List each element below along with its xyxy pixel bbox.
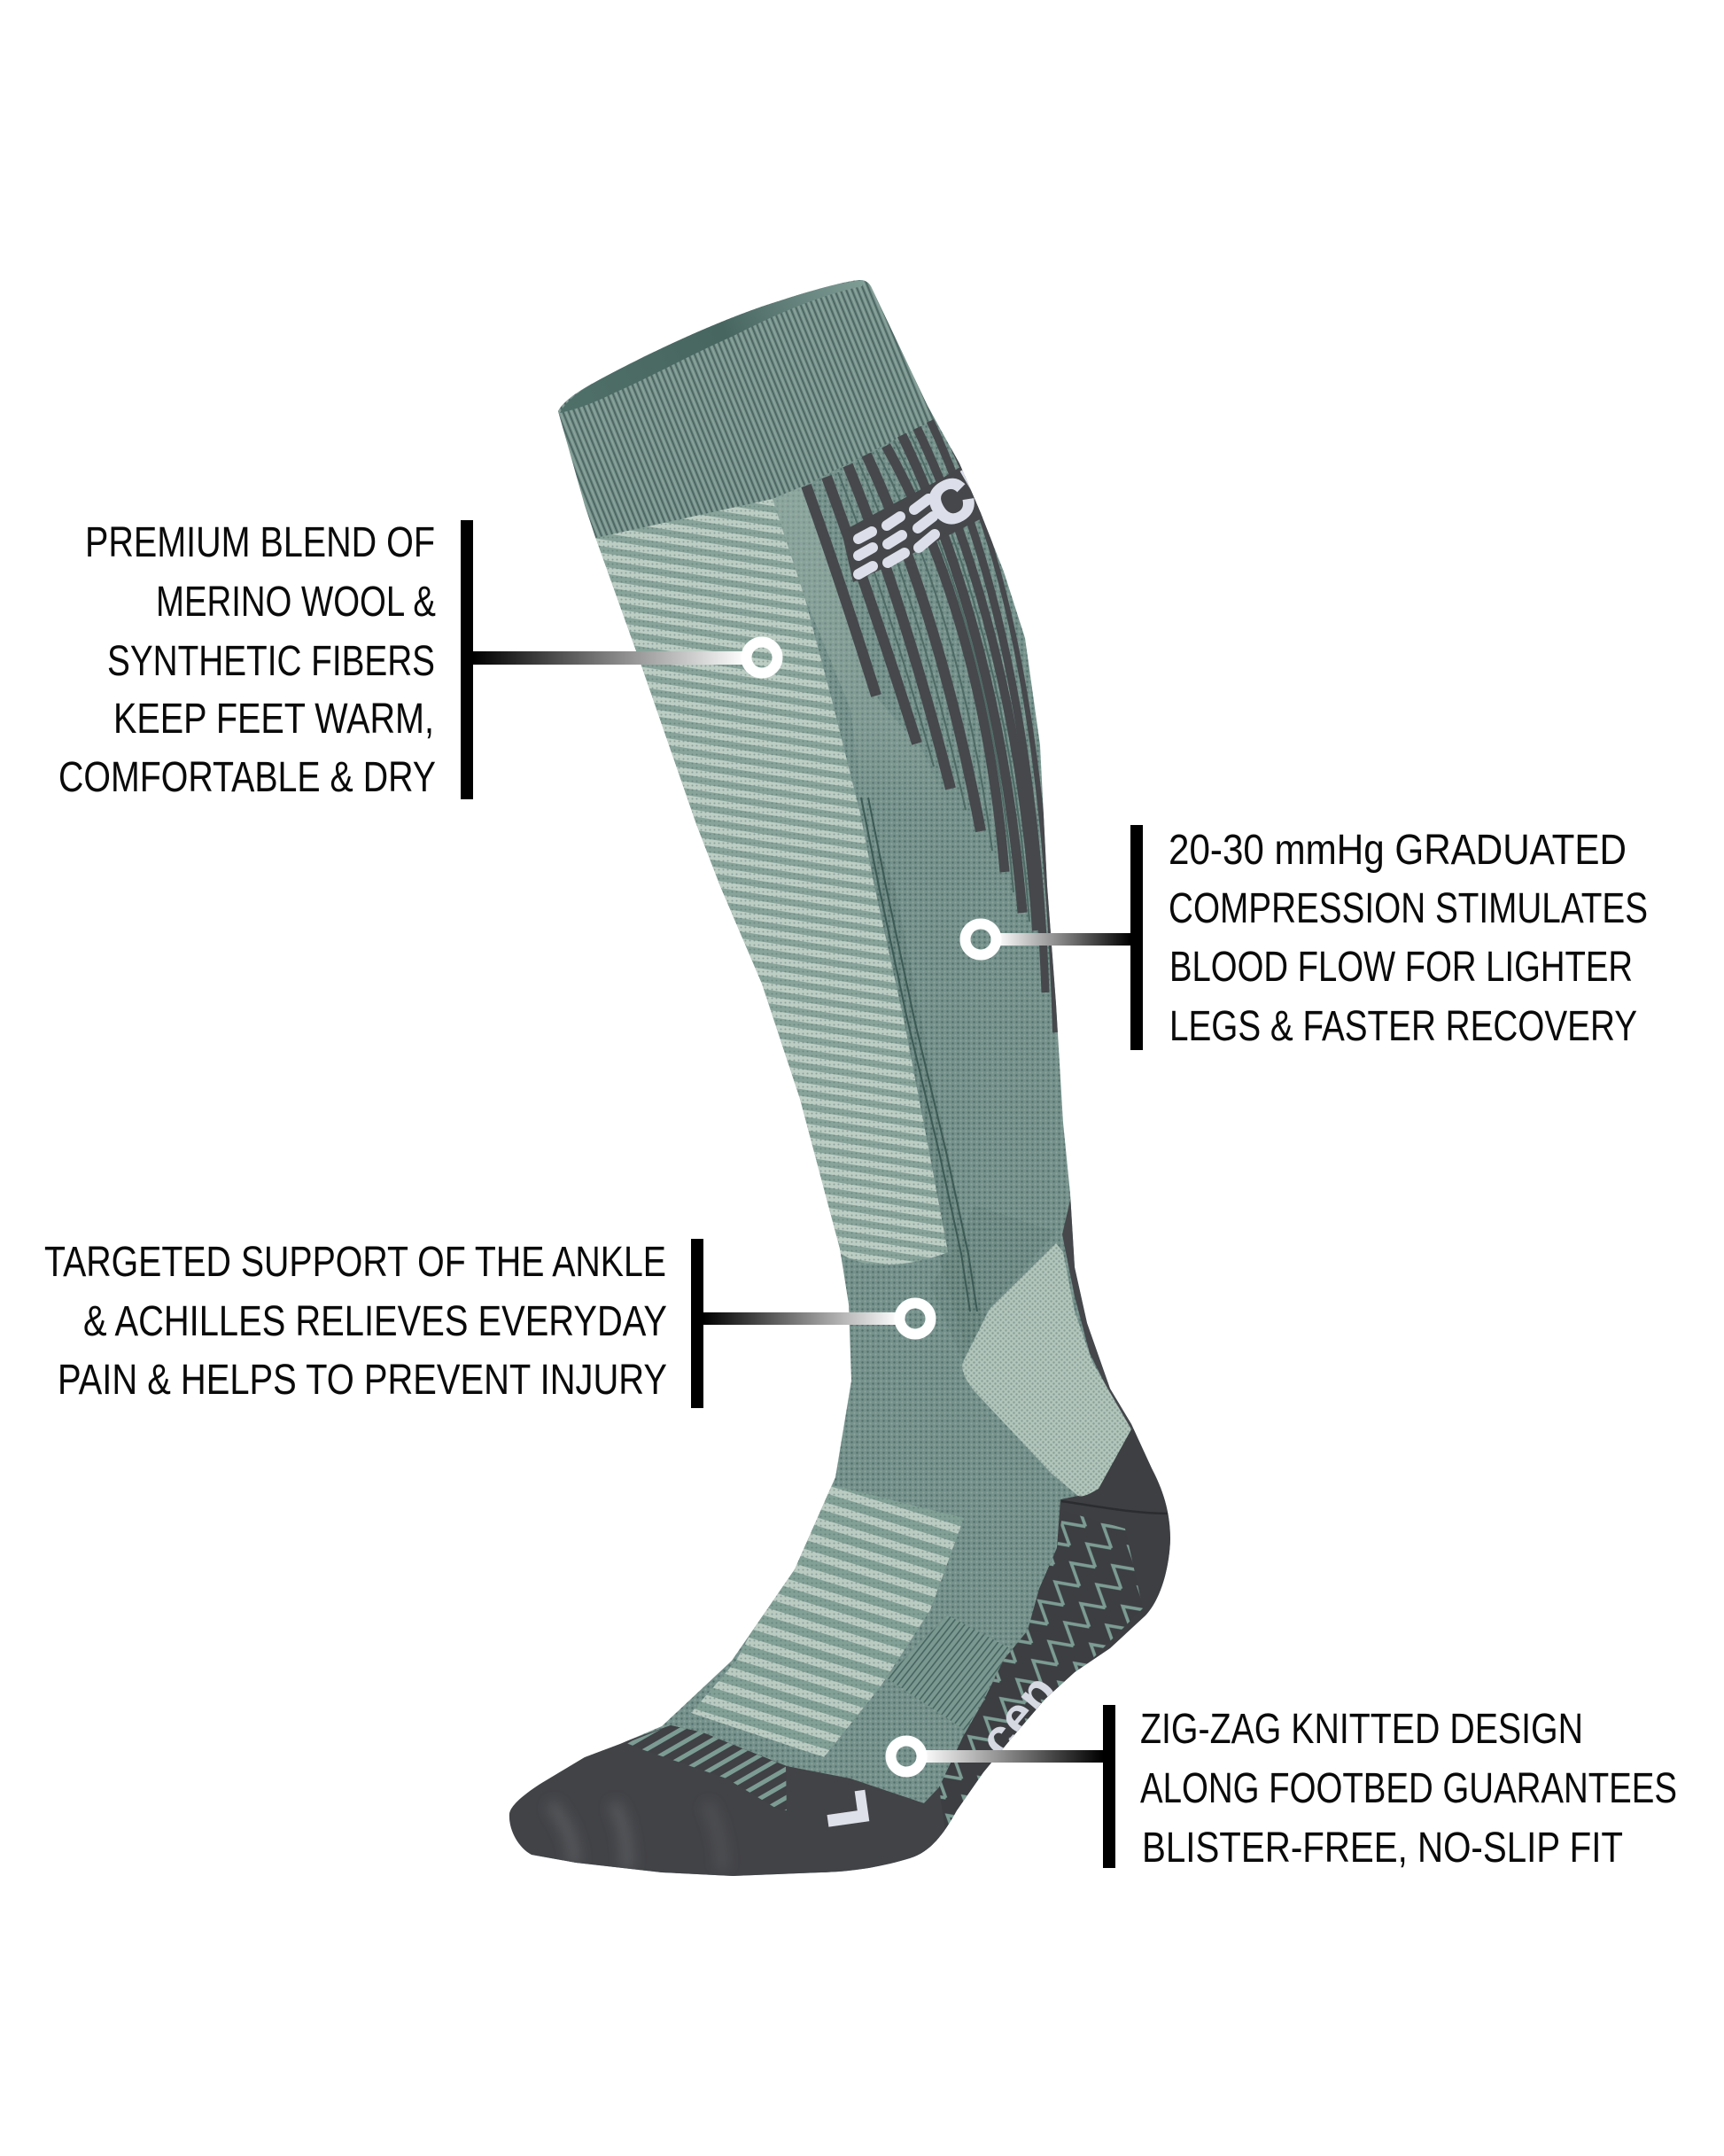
text: premium blend <box>58 519 436 801</box>
toe cap <box>496 1725 952 1883</box>
text: zig-zag: ZIG-ZAG KNITTED DESIGN <box>1140 1706 1583 1753</box>
heel crease <box>1061 1501 1168 1514</box>
toe folds <box>554 1808 722 1865</box>
callout: ankle support <box>44 1239 930 1408</box>
left foot mark: L <box>815 1789 879 1830</box>
callout: graduated compression <box>966 825 1648 1050</box>
connector <box>703 1312 900 1325</box>
text: premium blend: COMFORTABLE & DRY <box>58 754 436 801</box>
callout: premium blend <box>58 519 778 801</box>
marker ring <box>891 1740 921 1772</box>
heel and sole <box>912 1429 1170 1857</box>
text: ankle support <box>44 1239 667 1404</box>
seam stitch lines <box>861 798 977 1312</box>
text: premium blend: PREMIUM BLEND OF <box>85 519 435 566</box>
calf panel knit texture <box>592 499 948 1265</box>
thin rib stitches between compression lines <box>838 432 1029 922</box>
dark achilles strip <box>1062 1198 1134 1430</box>
compression lines <box>806 421 1055 1032</box>
sock opening <box>560 280 864 413</box>
callout: zig-zag footbed <box>891 1705 1677 1872</box>
foot ribbed zone <box>886 1615 1010 1731</box>
sole logo text: cep <box>967 1663 1068 1768</box>
text: premium blend: MERINO WOOL & <box>156 579 436 626</box>
text: zig-zag <box>1140 1706 1677 1872</box>
ribbed cuff <box>549 275 937 539</box>
connector <box>994 933 1130 946</box>
logo symbol bars <box>858 499 935 574</box>
marker ring <box>966 923 996 955</box>
zig-zag knit on sole <box>921 1511 1143 1865</box>
text: premium blend: KEEP FEET WARM, <box>113 696 434 743</box>
text: zig-zag: BLISTER-FREE, NO-SLIP FIT <box>1142 1825 1623 1872</box>
marker ring <box>900 1303 930 1335</box>
text: ankle support: & ACHILLES RELIEVES EVERYDAY <box>83 1298 667 1345</box>
foot striped panel <box>691 1483 964 1757</box>
shaded seam beside calf panel <box>868 851 964 1268</box>
sock base knit <box>496 266 1205 1887</box>
calf striped panel <box>592 499 948 1265</box>
text: compression <box>1169 827 1648 1050</box>
text: ankle support: PAIN & HELPS TO PREVENT INJURY <box>58 1357 667 1404</box>
sock illustration <box>496 266 1205 1887</box>
connector <box>920 1750 1103 1763</box>
bar <box>461 520 473 799</box>
logo band <box>842 463 985 582</box>
lighter knit beside calf panel <box>773 485 932 773</box>
text: ankle support: TARGETED SUPPORT OF THE ANKLE <box>44 1239 666 1286</box>
foot panel knit texture <box>691 1483 964 1757</box>
connector <box>473 651 748 665</box>
toe hatch band <box>626 1725 787 1810</box>
text: compression: 20-30 mmHg GRADUATED <box>1169 827 1627 874</box>
logo wordmark: CEP <box>916 424 1053 541</box>
darker knit above ankle <box>930 1205 1056 1362</box>
bar <box>1103 1705 1115 1868</box>
marker ring <box>746 642 778 673</box>
bar <box>691 1239 703 1408</box>
text: premium blend: SYNTHETIC FIBERS <box>107 638 435 685</box>
bar <box>1130 825 1143 1050</box>
ankle support panel <box>962 1243 1131 1497</box>
